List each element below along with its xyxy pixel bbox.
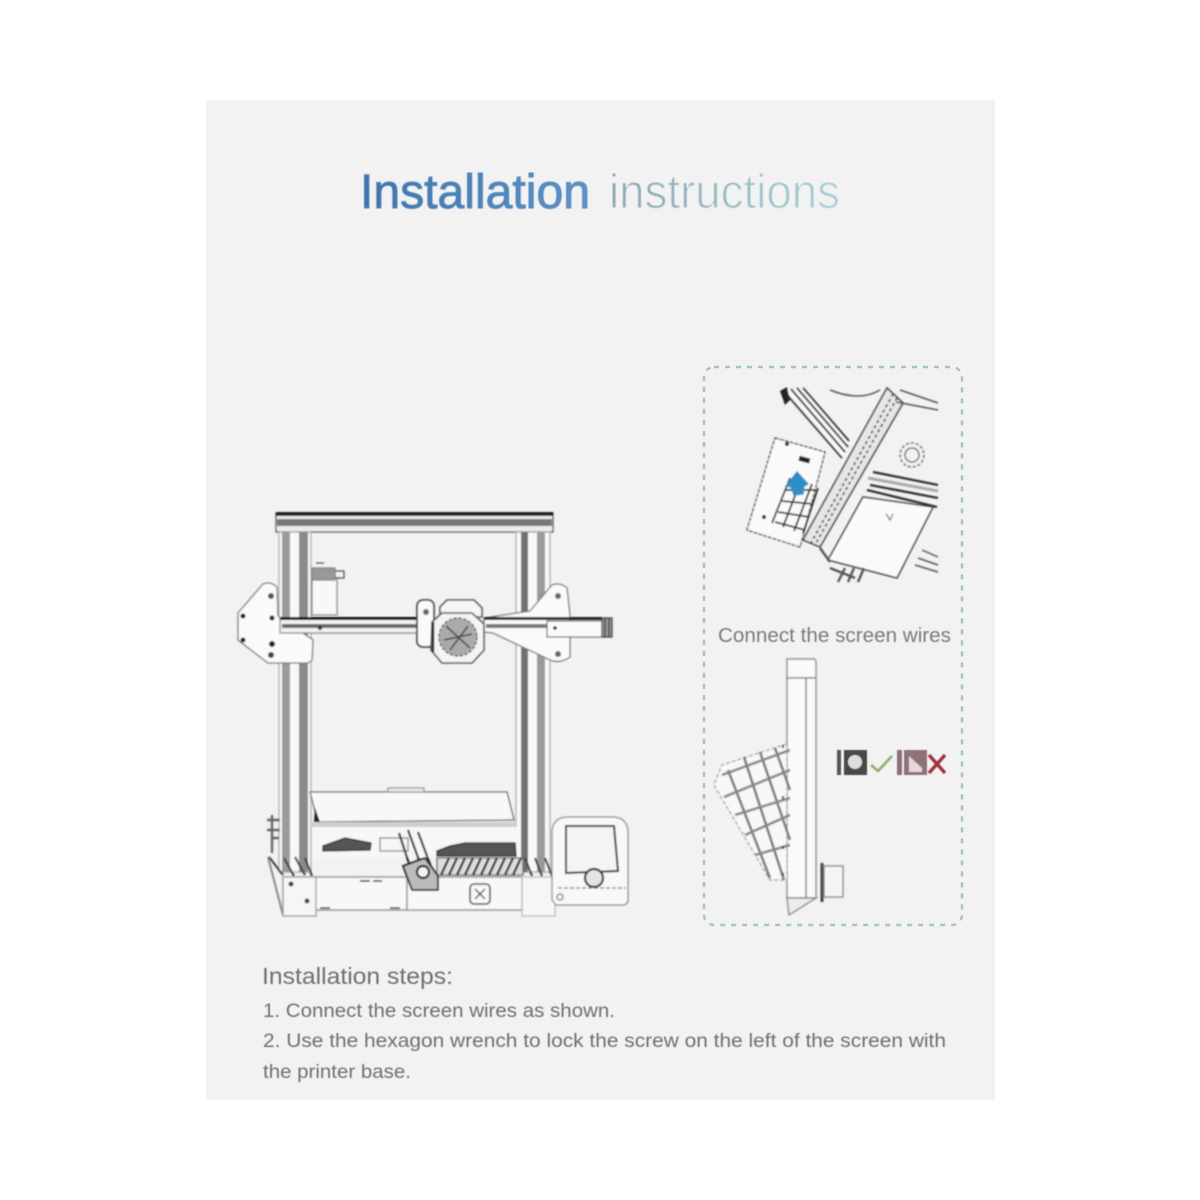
print bed — [310, 788, 516, 827]
text block: installation steps: 1. Connect the screen wires as shown. — [263, 1000, 615, 1022]
panel: dashed detail box — [704, 367, 962, 925]
title — [360, 166, 840, 219]
bracket — [787, 659, 843, 915]
control board — [747, 438, 825, 547]
right upright column — [516, 532, 550, 872]
control screen — [552, 817, 628, 905]
icon: correct orientation with check — [837, 750, 892, 775]
text block: installation steps: Installation steps: — [262, 963, 453, 989]
detail: side view of screen bracket — [714, 659, 843, 915]
diagram: 3D printer front view — [238, 512, 628, 916]
bed carriage and mechanics — [267, 815, 552, 885]
top crossbar — [276, 512, 553, 532]
title: instructions — [609, 166, 840, 219]
text block: installation steps — [262, 963, 946, 1083]
icon: blue arrow — [786, 472, 808, 495]
title: Installation — [360, 166, 590, 219]
left X-axis bracket and motor — [238, 583, 313, 663]
angled grid — [714, 744, 790, 880]
X-axis beam — [280, 617, 417, 633]
detail: screen wiring view — [747, 387, 938, 582]
print head carriage — [417, 600, 484, 663]
text block: installation steps: 2. Use the hexagon wrench to lock the screw on the left of the screen with — [263, 1030, 946, 1052]
filament spool holder — [312, 563, 344, 615]
caption: connect the screen wires: Connect the screen wires — [718, 624, 951, 647]
panel: background — [206, 100, 995, 1100]
printer base — [268, 857, 555, 916]
left upright column — [279, 532, 311, 872]
icon: wrong orientation with cross — [897, 750, 945, 775]
text block: installation steps: the printer base. — [263, 1061, 411, 1083]
right X-axis bracket — [484, 584, 612, 661]
base frame — [780, 387, 938, 582]
